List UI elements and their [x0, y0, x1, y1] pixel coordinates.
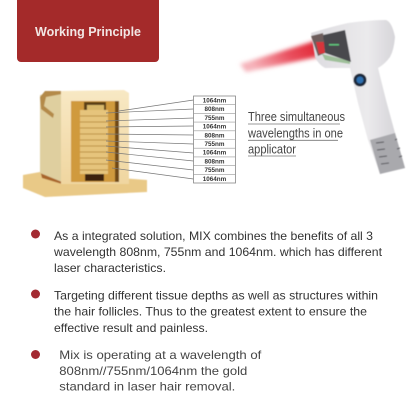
callout: three wavelengths: Three simultaneous: [248, 110, 345, 124]
wavelength table: 755nm: [205, 167, 225, 174]
bullet 1: wavelength 808nm, 755nm and 1064nm. which has different: [53, 246, 383, 259]
wavelength table: 808nm: [205, 106, 225, 113]
icon: laser beam: [240, 40, 322, 72]
bar stack: [80, 110, 108, 174]
bullet 1: laser characteristics.: [54, 262, 166, 275]
wavelength table: 808nm: [205, 132, 225, 139]
bullet 3: 808nm//755nm/1064nm the gold: [59, 365, 247, 378]
callout: three wavelengths: [247, 110, 345, 156]
wavelength table: 755nm: [205, 115, 225, 122]
wavelength table: 1064nm: [203, 150, 227, 157]
module window: [71, 101, 119, 182]
leader lines: [106, 100, 194, 179]
bullet 2: Targeting different tissue depths as well as structures within: [54, 290, 378, 302]
bullet 2: effective result and painless.: [54, 322, 208, 335]
wavelength table: 1064nm: [203, 124, 227, 131]
bullet 2: [31, 290, 378, 335]
wavelength table: 1064nm: [203, 176, 227, 183]
handpiece front: [311, 33, 325, 56]
bullet 1: [31, 230, 383, 275]
bullet 1: As a integrated solution, MIX combines the benefits of all 3: [54, 230, 373, 243]
bullet list: [31, 230, 383, 394]
module front: [61, 90, 129, 184]
bullet 3: standard in laser hair removal.: [59, 380, 235, 394]
grip: [370, 133, 405, 174]
bullet 3: [31, 349, 262, 394]
icon: laser handpiece: [311, 20, 405, 174]
title banner: [17, 0, 159, 62]
module side: [40, 91, 62, 182]
laser module illustration: [23, 90, 147, 197]
callout: three wavelengths: applicator: [248, 142, 296, 156]
base plate: [23, 172, 147, 197]
callout: three wavelengths: wavelengths in one: [247, 126, 343, 140]
top cap: [84, 102, 106, 110]
bullet 3: Mix is operating at a wavelength of: [59, 349, 262, 362]
bullet 2: the hair follicles. Thus to the greatest extent to ensure the: [54, 306, 367, 318]
wavelength table: 755nm: [205, 141, 225, 148]
banner heading: Working Principle: [35, 25, 141, 39]
wavelength table: 808nm: [205, 158, 225, 165]
wavelength table: [194, 96, 236, 183]
wavelength table: 1064nm: [203, 98, 227, 104]
handpiece body: [311, 20, 405, 174]
bottom cap: [85, 173, 104, 181]
handpiece display: [323, 30, 351, 62]
power button: [354, 74, 366, 86]
